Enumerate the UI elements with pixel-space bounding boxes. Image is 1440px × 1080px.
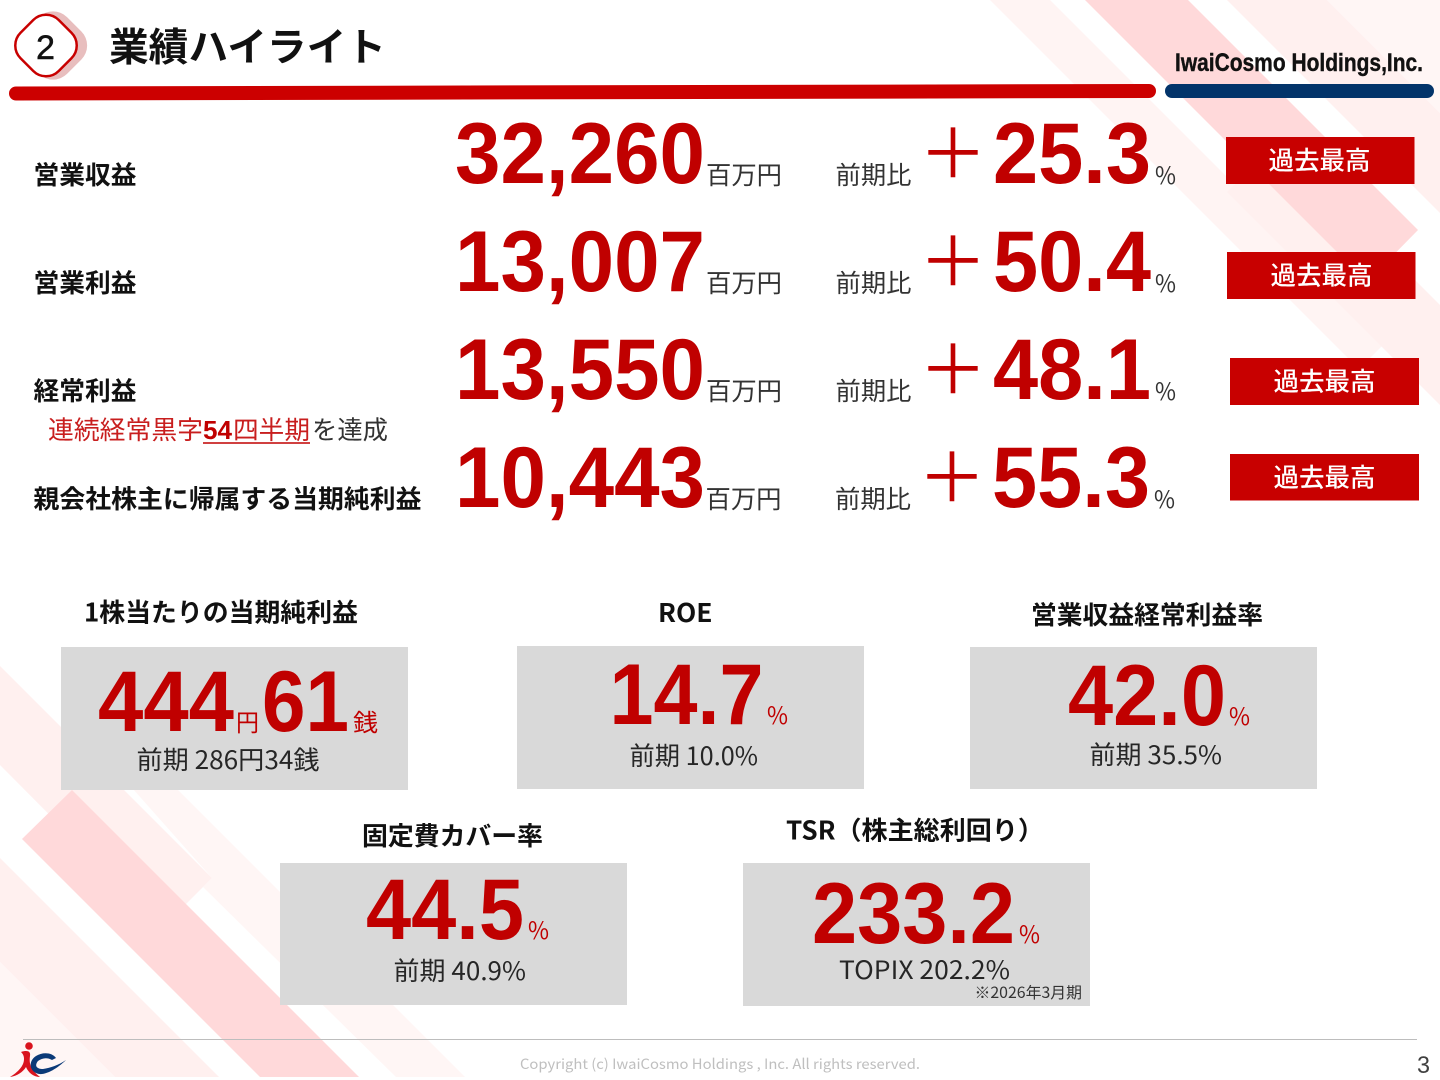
panel: 1株当たりの当期純利益: 1株当たりの当期純利益 <box>84 592 358 630</box>
row: 親会社株主に帰属する当期純利益: % <box>1154 480 1175 515</box>
header bar: navy <box>1172 84 1427 98</box>
row: 経常利益: 前期比 <box>836 372 912 408</box>
row: 営業収益: 過去最高 <box>1268 140 1370 178</box>
row: 営業利益 <box>34 207 1416 310</box>
panel: ROE <box>517 593 864 789</box>
panel: TSR（株主総利回り）: ※2026年3月期 <box>974 981 1082 1003</box>
panel: 1株当たりの当期純利益: 前期 286円34銭 <box>136 740 320 777</box>
panel: 営業収益経常利益率: 前期 35.5% <box>1090 735 1222 772</box>
row: 経常利益: ＋ <box>919 315 987 414</box>
row: 親会社株主に帰属する当期純利益: 10,443 <box>455 430 705 526</box>
row: 親会社株主に帰属する当期純利益: 百万円 <box>706 480 782 516</box>
row: 経常利益: 過去最高 <box>1274 362 1376 398</box>
panel: TSR（株主総利回り）: TOPIX 202.2% <box>839 950 1010 987</box>
row: 営業収益: 25.3 <box>993 106 1151 202</box>
row: 営業利益: 13,007 <box>455 214 705 310</box>
panel: 固定費カバー率 <box>280 816 627 1005</box>
panel: ROE: 前期 10.0% <box>630 736 758 773</box>
row: 営業利益: 百万円 <box>706 264 782 300</box>
title: 業績ハイライト <box>109 17 386 73</box>
row: 営業収益: 前期比 <box>836 156 912 192</box>
page number: 3 <box>1417 1052 1430 1079</box>
row: 営業収益: 32,260 <box>455 106 705 202</box>
panel: 営業収益経常利益率: 42.0 <box>1068 648 1226 744</box>
panel: 1株当たりの当期純利益: 円 <box>236 703 259 738</box>
row: 経常利益: 百万円 <box>706 372 782 408</box>
panel: ROE: ROE <box>658 593 712 630</box>
row: 親会社株主に帰属する当期純利益: 親会社株主に帰属する当期純利益 <box>34 479 422 516</box>
row: 営業収益 <box>34 99 1414 202</box>
panel: 固定費カバー率: 固定費カバー率 <box>362 816 543 853</box>
panel: ROE: % <box>767 696 788 731</box>
row: 営業利益: ＋ <box>919 207 987 306</box>
copyright: Copyright (c) IwaiCosmo Holdings , Inc. All rights reserved. <box>520 1054 920 1074</box>
row: 経常利益: 経常利益 <box>34 371 136 408</box>
panel: 固定費カバー率: 44.5 <box>366 862 524 958</box>
row: 親会社株主に帰属する当期純利益: 前期比 <box>835 480 911 516</box>
row: 営業収益: 百万円 <box>706 156 782 192</box>
row: 経常利益: 48.1 <box>993 322 1151 418</box>
panel: TSR（株主総利回り）: % <box>1019 915 1040 950</box>
note: 連続経常黒字54四半期を達成: 四半期 <box>233 410 310 447</box>
section number badge <box>8 3 95 88</box>
panel: TSR（株主総利回り）: 233.2 <box>812 866 1015 962</box>
row: 営業利益: 営業利益 <box>34 263 136 300</box>
icon: company logo <box>10 1042 66 1077</box>
panel: 1株当たりの当期純利益: 61 <box>262 654 349 750</box>
panel: 1株当たりの当期純利益 <box>61 592 408 790</box>
panel: 1株当たりの当期純利益: 銭 <box>353 703 378 738</box>
row: 経常利益 <box>34 315 1419 418</box>
note: 連続経常黒字54四半期を達成: 連続経常黒字 <box>48 410 203 447</box>
row: 親会社株主に帰属する当期純利益 <box>34 423 1419 526</box>
row: 親会社株主に帰属する当期純利益: ＋ <box>918 423 986 522</box>
row: 親会社株主に帰属する当期純利益: 55.3 <box>992 430 1150 526</box>
panel: TSR（株主総利回り）: TSR（株主総利回り） <box>786 810 1044 848</box>
note: 連続経常黒字54四半期を達成 <box>48 410 388 447</box>
panel: 営業収益経常利益率 <box>970 595 1317 789</box>
panel: 営業収益経常利益率: 営業収益経常利益率 <box>1031 595 1263 632</box>
panel: TSR（株主総利回り） <box>743 810 1090 1006</box>
row: 営業収益: 営業収益 <box>34 155 136 192</box>
panel: 固定費カバー率: 前期 40.9% <box>394 951 526 988</box>
note: 連続経常黒字54四半期を達成: を達成 <box>312 410 388 447</box>
row: 営業収益: ＋ <box>919 99 987 198</box>
panel: ROE: 14.7 <box>610 647 764 743</box>
panel: 営業収益経常利益率: % <box>1229 697 1250 732</box>
row: 営業利益: 前期比 <box>836 264 912 300</box>
row: 親会社株主に帰属する当期純利益: 過去最高 <box>1274 458 1376 494</box>
header bar: red <box>16 91 1149 94</box>
section number badge: 2 <box>36 29 55 67</box>
row: 営業利益: 50.4 <box>993 214 1151 310</box>
row: 営業収益: % <box>1155 156 1176 191</box>
panel: 1株当たりの当期純利益: 444 <box>98 654 234 750</box>
row: 営業利益: 過去最高 <box>1270 256 1372 292</box>
row: 経常利益: % <box>1155 372 1176 407</box>
note: 連続経常黒字54四半期を達成: 54 <box>203 415 233 445</box>
footer rule <box>23 1038 1417 1040</box>
row: 経常利益: 13,550 <box>455 322 705 418</box>
panel: 固定費カバー率: % <box>528 911 549 946</box>
row: 営業利益: % <box>1155 264 1176 299</box>
